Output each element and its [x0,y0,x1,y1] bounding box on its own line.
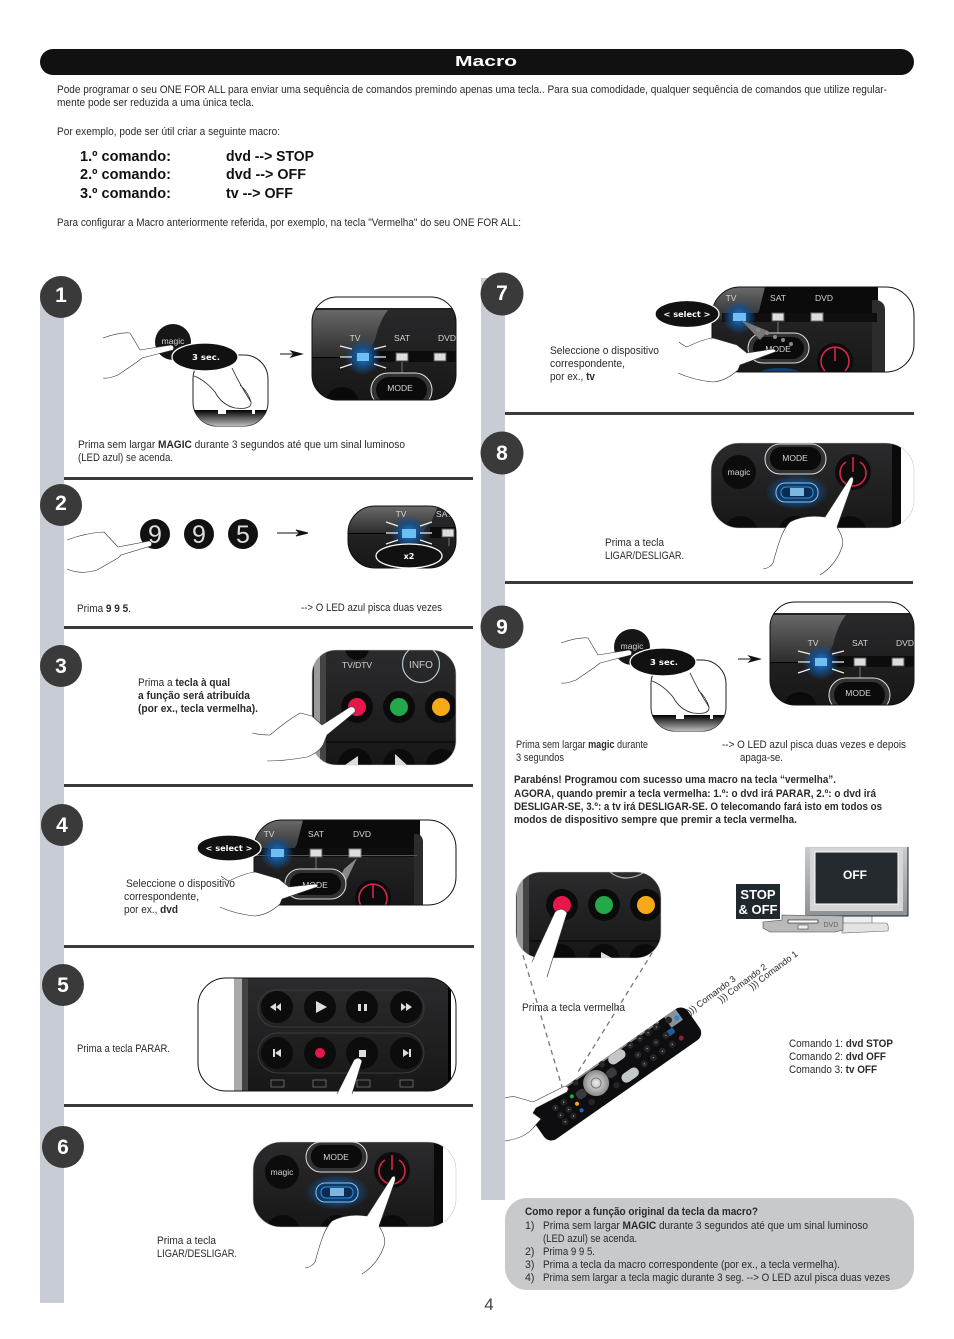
intro text [57,84,887,138]
remote mode row with blue LED: MODE [387,383,413,393]
full remote control [527,1004,705,1144]
television with OFF screen [805,847,908,933]
page number: 4 [484,1295,494,1314]
badge 3 [40,645,82,687]
step 7 text [550,345,659,383]
remote LED double blink [348,506,456,568]
step 9 LED text: --> O LED azul pisca duas vezes e depois [722,739,906,751]
remote mode row with blue LED: TV [350,333,361,343]
number buttons 9 9 5: 5 [236,521,250,549]
step 5 [42,964,456,1094]
dashed zoom lines [523,945,657,1087]
press red key label: Prima a tecla vermelha [522,1002,625,1014]
step 3 text: Prima a tecla à qual [138,677,230,689]
command summary [789,1038,893,1076]
step 4 text: correspondente, [124,891,199,903]
icon: zoomed finger inset [648,660,728,731]
step 2 text: Prima 9 9 5. [77,603,131,615]
label: select [197,835,261,861]
label: x2 [376,544,442,568]
remote colour keys close-up [516,872,662,958]
step 6 text [157,1235,237,1260]
remote device selector dvd: TV [264,829,275,839]
command summary: Comando 3: tv OFF [789,1064,877,1076]
step 8 text: Prima a tecla [605,537,664,549]
icon: hand pressing red key [252,707,355,761]
number buttons 9 9 5: 9 [192,521,206,549]
signal labels: ))) Comando 1 [747,949,800,992]
panel: reset macro key: Como repor a função original da tecla da macro? [525,1206,758,1218]
congratulations text [514,774,882,826]
icon: finger on stop [337,1058,362,1094]
macro command list [80,149,314,202]
remote mode row with blue LED [312,296,456,400]
remote device selector tv: SAT [770,293,786,303]
step 9 LED text [722,739,906,764]
remote device selector dvd: MODE [302,880,328,890]
step 9 press text: 3 segundos [516,752,564,764]
macro command list: 1.º comando: [80,149,171,165]
icon: magic button pressed [561,629,650,683]
panel: reset macro key: (LED azul) se acenda. [543,1233,637,1245]
step 9 press text [516,739,648,764]
remote mode row with blue LED: TV [808,638,819,648]
badge 8: 8 [496,442,508,465]
badge 5 [42,964,84,1006]
panel: reset macro key: Prima sem largar a tecla magic durante 3 seg. --> O LED azul pisca duas vezes [543,1272,890,1284]
step 6 text: Prima a tecla [157,1235,216,1247]
label: select: < select > [206,844,252,853]
panel: reset macro key: 2) [525,1246,534,1258]
step 8 text: LIGAR/DESLIGAR. [605,550,684,562]
step 3 text: (por ex., tecla vermelha). [138,703,258,715]
label: 3 sec: 3 sec. [650,658,678,667]
step 3 [40,645,456,766]
arrow [280,351,302,357]
macro command list: dvd --> OFF [226,167,306,183]
badge 4: 4 [56,814,68,837]
arrow [277,530,308,536]
remote device selector tv: MODE [765,344,791,354]
panel: reset macro key: Prima a tecla da macro correspondente (por ex., a tecla vermelha). [543,1259,840,1271]
signal labels: ))) Comando 2 [716,962,769,1005]
remote power key: magic [728,467,751,477]
icon: hand pressing power [305,1176,395,1274]
badge 9: 9 [496,616,508,639]
setup sentence: Para configurar a Macro anteriormente referida, por exemplo, na tecla "Vermelha" do seu ONE FOR ALL: [57,217,521,229]
arrow [738,656,760,662]
step 3 text: a função será atribuída [138,690,250,702]
step 4 text: por ex., dvd [124,904,178,916]
remote power key: MODE [782,453,808,463]
panel: reset macro key: Prima sem largar MAGIC durante 3 segundos até que um sinal luminoso [543,1220,868,1232]
step 7 [480,272,914,383]
badge 6: 6 [57,1136,69,1159]
step 5 text: Prima a tecla PARAR. [77,1043,170,1055]
badge 7 [480,272,524,316]
remote device selector dvd: DVD [353,829,371,839]
step 1 text: Prima sem largar MAGIC durante 3 segundos até que um sinal luminoso [78,439,405,451]
badge 9 [480,606,524,648]
badge 4 [41,804,83,846]
title bar [40,49,914,75]
step 1 [40,276,456,464]
icon: finger on red key [532,909,567,977]
remote power key [710,442,914,528]
remote LED double blink: SAT [436,509,452,519]
icon: magic button pressed: magic [621,641,644,651]
remote device selector tv: TV [726,293,737,303]
badge 5: 5 [57,974,69,997]
step 7 text: por ex., tv [550,371,595,383]
icon: hand pressing mode [220,872,318,916]
panel: reset macro key: 1) [525,1220,534,1232]
step 6 [42,1126,456,1274]
step 1 text [78,439,405,464]
macro command list: 2.º comando: [80,167,171,183]
macro command list: dvd --> STOP [226,149,314,165]
step 2 text: --> O LED azul pisca duas vezes [301,602,442,614]
badge 1 [40,276,82,318]
intro text: Pode programar o seu ONE FOR ALL para enviar uma sequência de comandos premindo apenas uma tecla.. Para sua comodidade, qualquer sequência de comandos que utilize regular- [57,84,887,96]
icon: magic button pressed [103,324,191,378]
intro text: mente pode ser reduzida a uma única tecla. [57,97,254,109]
icon: zoomed finger inset [190,355,270,426]
remote colour keys: TV/DTV [342,660,372,670]
label: 3 sec [172,343,238,371]
number buttons 9 9 5: 9 [148,521,162,549]
step 4 text: Seleccione o dispositivo [126,878,235,890]
icon: hand [67,532,152,572]
badge 8 [480,432,524,474]
remote device selector dvd [254,820,456,916]
icon: hand holding remote [505,1086,568,1141]
badge 1: 1 [55,284,67,307]
television with OFF screen: OFF [843,868,867,882]
remote mode row with blue LED: SAT [852,638,868,648]
remote mode row with blue LED: DVD [438,333,456,343]
remote device selector tv [712,287,914,382]
step 8 text [605,537,684,562]
STOP and OFF label [736,884,780,919]
panel: reset macro key [505,1198,914,1290]
macro command list: 3.º comando: [80,186,171,202]
command summary: Comando 1: dvd STOP [789,1038,893,1050]
label: select: < select > [664,310,710,319]
badge 7: 7 [496,282,508,305]
icon: hand pressing power [763,477,853,575]
remote colour keys [312,650,456,766]
panel: reset macro key: Prima 9 9 5. [543,1246,595,1258]
panel: reset macro key: 3) [525,1259,534,1271]
remote mode row with blue LED: DVD [896,638,914,648]
remote power key: MODE [323,1152,349,1162]
step 2 [40,484,456,615]
icon: hand pressing mode [678,338,776,382]
number buttons 9 9 5 [140,519,258,549]
remote power key [252,1142,456,1228]
step 3 text [138,677,258,715]
congratulations text: Parabéns! Programou com sucesso uma macro na tecla “vermelha”. [514,774,836,786]
label: 3 sec [630,648,696,676]
step 4 text [124,878,235,916]
remote colour keys: INFO [409,660,433,671]
step 9 press text: Prima sem largar magic durante [516,739,648,751]
label: x2: x2 [404,552,414,561]
step 9 [480,602,914,826]
congratulations text: modos de dispositivo sempre que premir a tecla vermelha. [514,814,797,826]
icon: magic button pressed: magic [162,336,185,346]
step 1 text: (LED azul) se acenda. [78,452,173,464]
signal labels [685,949,800,1017]
label: select [655,300,719,328]
intro text: Por exemplo, pode ser útil criar a seguinte macro: [57,126,280,138]
step 9 LED text: apaga-se. [740,752,783,764]
signal labels: ))) Comando 3 [685,974,738,1017]
remote device selector tv: DVD [815,293,833,303]
remote LED double blink: TV [396,509,407,519]
DVD player: DVD [824,922,838,929]
remote mode row with blue LED [770,602,914,706]
remote mode row with blue LED: MODE [845,688,871,698]
panel: reset macro key: 4) [525,1272,534,1284]
macro command list: tv --> OFF [226,186,293,202]
remote transport keys [198,978,456,1091]
command summary: Comando 2: dvd OFF [789,1051,886,1063]
badge 6 [42,1126,84,1168]
remote power key: magic [271,1167,294,1177]
step 6 text: LIGAR/DESLIGAR. [157,1248,237,1260]
DVD player [763,915,843,932]
step 8 [480,432,914,575]
remote mode row with blue LED: SAT [394,333,410,343]
remote device selector dvd: SAT [308,829,324,839]
badge 2: 2 [55,492,67,515]
label: 3 sec: 3 sec. [192,353,220,362]
step 2 text [77,602,442,615]
congratulations text: DESLIGAR-SE, 3.º: a tv irá DESLIGAR-SE. O telecomando fará isto em todos os [514,801,882,813]
step 7 text: correspondente, [550,358,625,370]
badge 3: 3 [55,655,67,678]
step 7 text: Seleccione o dispositivo [550,345,659,357]
step 4 [41,804,456,916]
badge 2 [40,484,82,526]
congratulations text: AGORA, quando premir a tecla vermelha: 1.º: o dvd irá PARAR, 2.º: o dvd irá [514,788,876,800]
STOP and OFF label: & OFF [738,902,778,917]
STOP and OFF label: STOP [740,887,776,902]
title bar: Macro [455,53,517,70]
